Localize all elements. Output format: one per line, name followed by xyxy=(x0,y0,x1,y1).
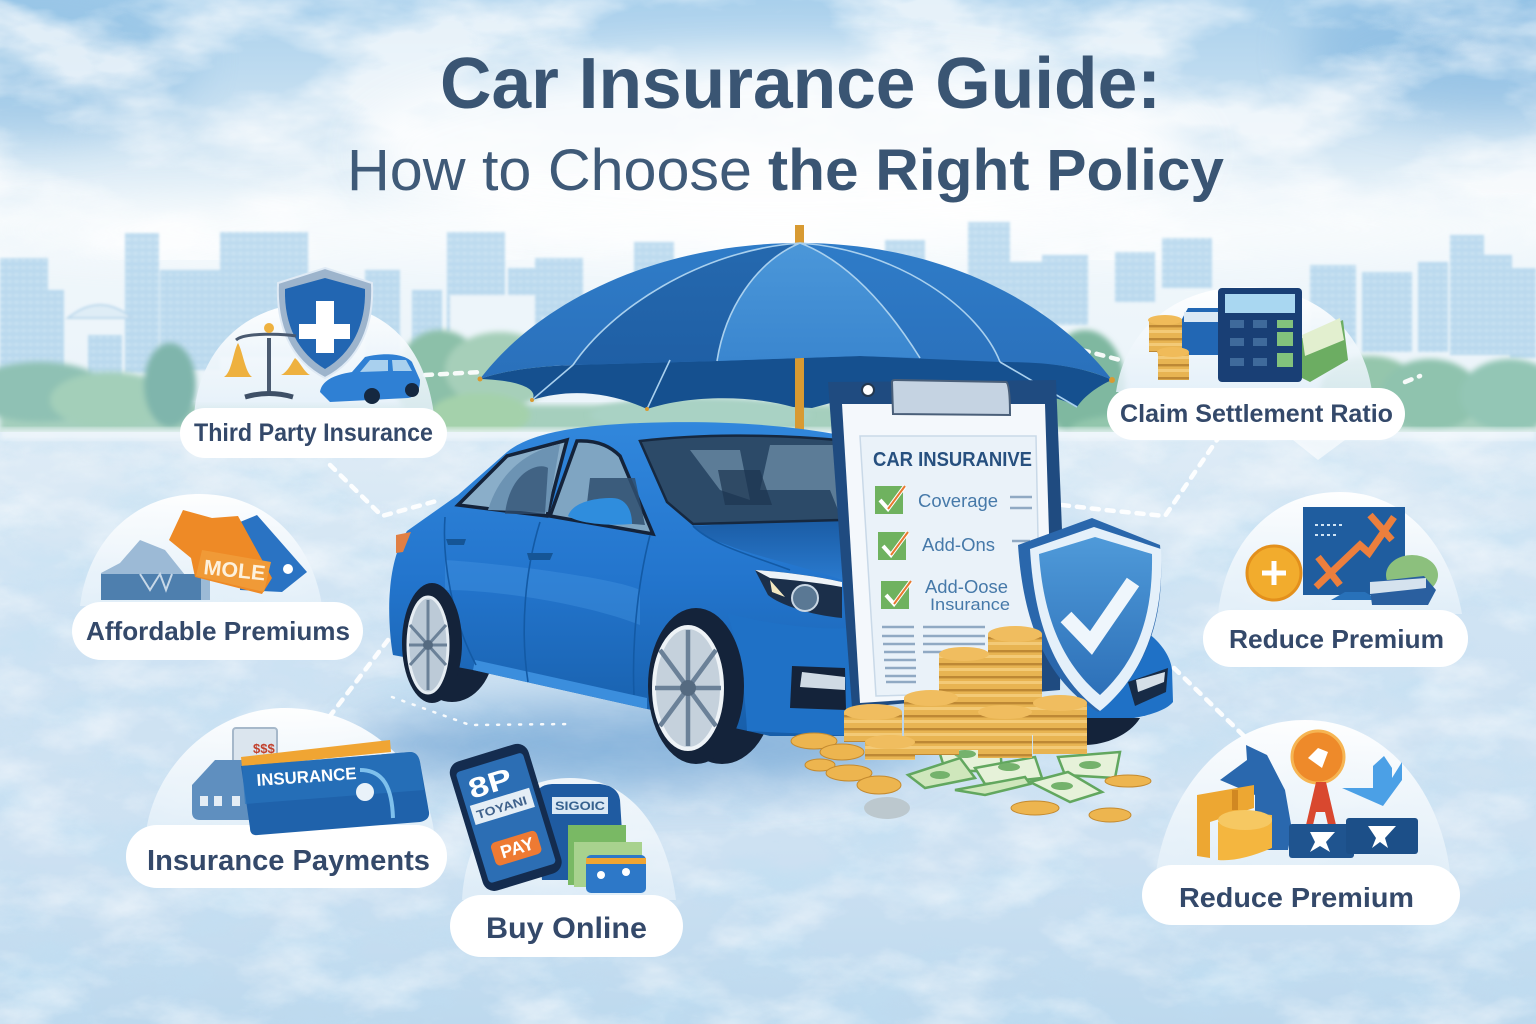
title xyxy=(347,44,1224,203)
hood xyxy=(693,518,848,582)
label pill xyxy=(450,895,683,957)
title line one: Car Insurance Guide: xyxy=(440,44,1161,124)
rear quarter window xyxy=(458,440,567,516)
icon: blue arrow xyxy=(1342,756,1402,806)
front wheel far tire xyxy=(670,616,774,764)
panel: affordable premiums xyxy=(72,494,363,660)
icon: phone xyxy=(447,741,565,894)
icon: wallet phone xyxy=(535,784,625,880)
icon: dark boxes xyxy=(1289,818,1418,858)
dome xyxy=(1156,720,1450,872)
umbrella xyxy=(478,225,1115,430)
icon: cash stack xyxy=(1302,318,1348,382)
label: Insurance Payments xyxy=(147,845,430,877)
label pill xyxy=(180,408,447,458)
panel: third party insurance xyxy=(180,268,447,458)
icon: scales xyxy=(224,323,310,397)
icon: cards xyxy=(568,825,646,893)
dome xyxy=(194,303,434,415)
clipboard clip xyxy=(892,380,1010,415)
icon: coins xyxy=(1148,315,1189,380)
icon: blue pump block xyxy=(1220,745,1292,850)
icon: medal A xyxy=(1292,731,1344,825)
dome xyxy=(462,778,676,900)
icon: small car xyxy=(320,354,420,404)
icon: orange tag xyxy=(169,510,272,594)
label: Affordable Premiums xyxy=(86,616,350,646)
icon: phone: 8P xyxy=(465,762,516,805)
label pill xyxy=(1142,865,1460,925)
car xyxy=(389,422,1173,764)
side highlight xyxy=(445,560,640,625)
icon: orange tag: MOLE xyxy=(202,556,267,585)
panel: buy online xyxy=(447,741,683,957)
clipboard checklist xyxy=(828,380,1062,708)
icon: blue wallet xyxy=(1176,308,1222,355)
shield with check xyxy=(1018,518,1161,712)
icon: insurance card: INSURANCE xyxy=(256,764,357,790)
dome xyxy=(146,708,434,832)
background sky xyxy=(0,0,1536,440)
coin stacks xyxy=(791,626,1151,822)
dome xyxy=(1218,492,1462,614)
umbrella pole xyxy=(795,225,804,430)
icon: gold coin xyxy=(1247,546,1301,600)
icon: shield with cross xyxy=(278,268,372,378)
rear wheel xyxy=(402,583,462,703)
label: Reduce Premium xyxy=(1179,882,1414,913)
icon: monitor chart xyxy=(1303,507,1405,600)
panel: reduce premium lower xyxy=(1142,720,1460,925)
label: Buy Online xyxy=(486,912,647,945)
item: add-ons: Add-Ons xyxy=(922,535,995,555)
dome xyxy=(80,494,322,606)
front bumper xyxy=(727,613,856,736)
loose coins xyxy=(791,733,1151,822)
check: add-oose xyxy=(881,581,911,609)
city skyline xyxy=(0,222,1536,380)
item: insurance line: Insurance xyxy=(930,595,1010,614)
umbrella underside xyxy=(480,350,1112,409)
check: coverage xyxy=(875,486,905,514)
panel: insurance payments xyxy=(126,708,447,888)
label: Third Party Insurance xyxy=(194,419,433,447)
panel: claim settlement ratio xyxy=(1107,287,1405,460)
checklist heading: CAR INSURANIVE xyxy=(873,449,1032,471)
windshield xyxy=(640,436,840,524)
tail light xyxy=(396,532,411,553)
umbrella canopy xyxy=(478,243,1115,411)
icon: blue tag xyxy=(240,515,307,592)
icon: phone: TOYANI xyxy=(475,793,529,822)
label: Claim Settlement Ratio xyxy=(1120,400,1393,428)
rear wheel far tire xyxy=(410,594,494,702)
panel: reduce premium upper xyxy=(1203,492,1468,667)
item: add-oose insurance: Add-Oose xyxy=(925,577,1008,597)
car body xyxy=(389,422,856,736)
icon: grey card xyxy=(192,760,255,820)
title line two bold: the Right Policy xyxy=(768,138,1224,203)
icon: small receipt: $$$ xyxy=(253,741,275,756)
icon: wallet phone: SIGOIC xyxy=(555,799,605,813)
headlight xyxy=(755,570,842,618)
ground xyxy=(0,428,1536,1024)
dashed connectors xyxy=(330,350,1420,738)
cash pile xyxy=(908,738,1120,802)
item: coverage: Coverage xyxy=(918,491,998,511)
grille xyxy=(790,666,846,710)
door lines and handles xyxy=(444,517,790,695)
label pill xyxy=(1203,610,1468,667)
car front right fragment xyxy=(1060,622,1173,745)
check: add-ons xyxy=(878,532,908,560)
label pill xyxy=(126,825,447,888)
side mirror xyxy=(568,498,632,525)
front side window xyxy=(550,441,653,534)
icon: calculator xyxy=(1218,288,1302,382)
title line two regular: How to Choose xyxy=(347,138,752,203)
icon: small receipt xyxy=(233,728,277,763)
icon: box and cash xyxy=(1369,555,1438,605)
tree line xyxy=(0,330,1536,445)
icon: insurance card xyxy=(241,740,429,835)
icon: grey boxes xyxy=(101,540,210,600)
icon: phone: PAY xyxy=(498,833,536,862)
rocker xyxy=(473,660,647,709)
front wheel xyxy=(648,608,744,764)
dome xyxy=(1116,287,1372,392)
label pill xyxy=(72,602,363,660)
label pill xyxy=(1107,388,1405,440)
icon: gold blocks xyxy=(1197,785,1272,860)
label: Reduce Premium xyxy=(1229,624,1444,654)
